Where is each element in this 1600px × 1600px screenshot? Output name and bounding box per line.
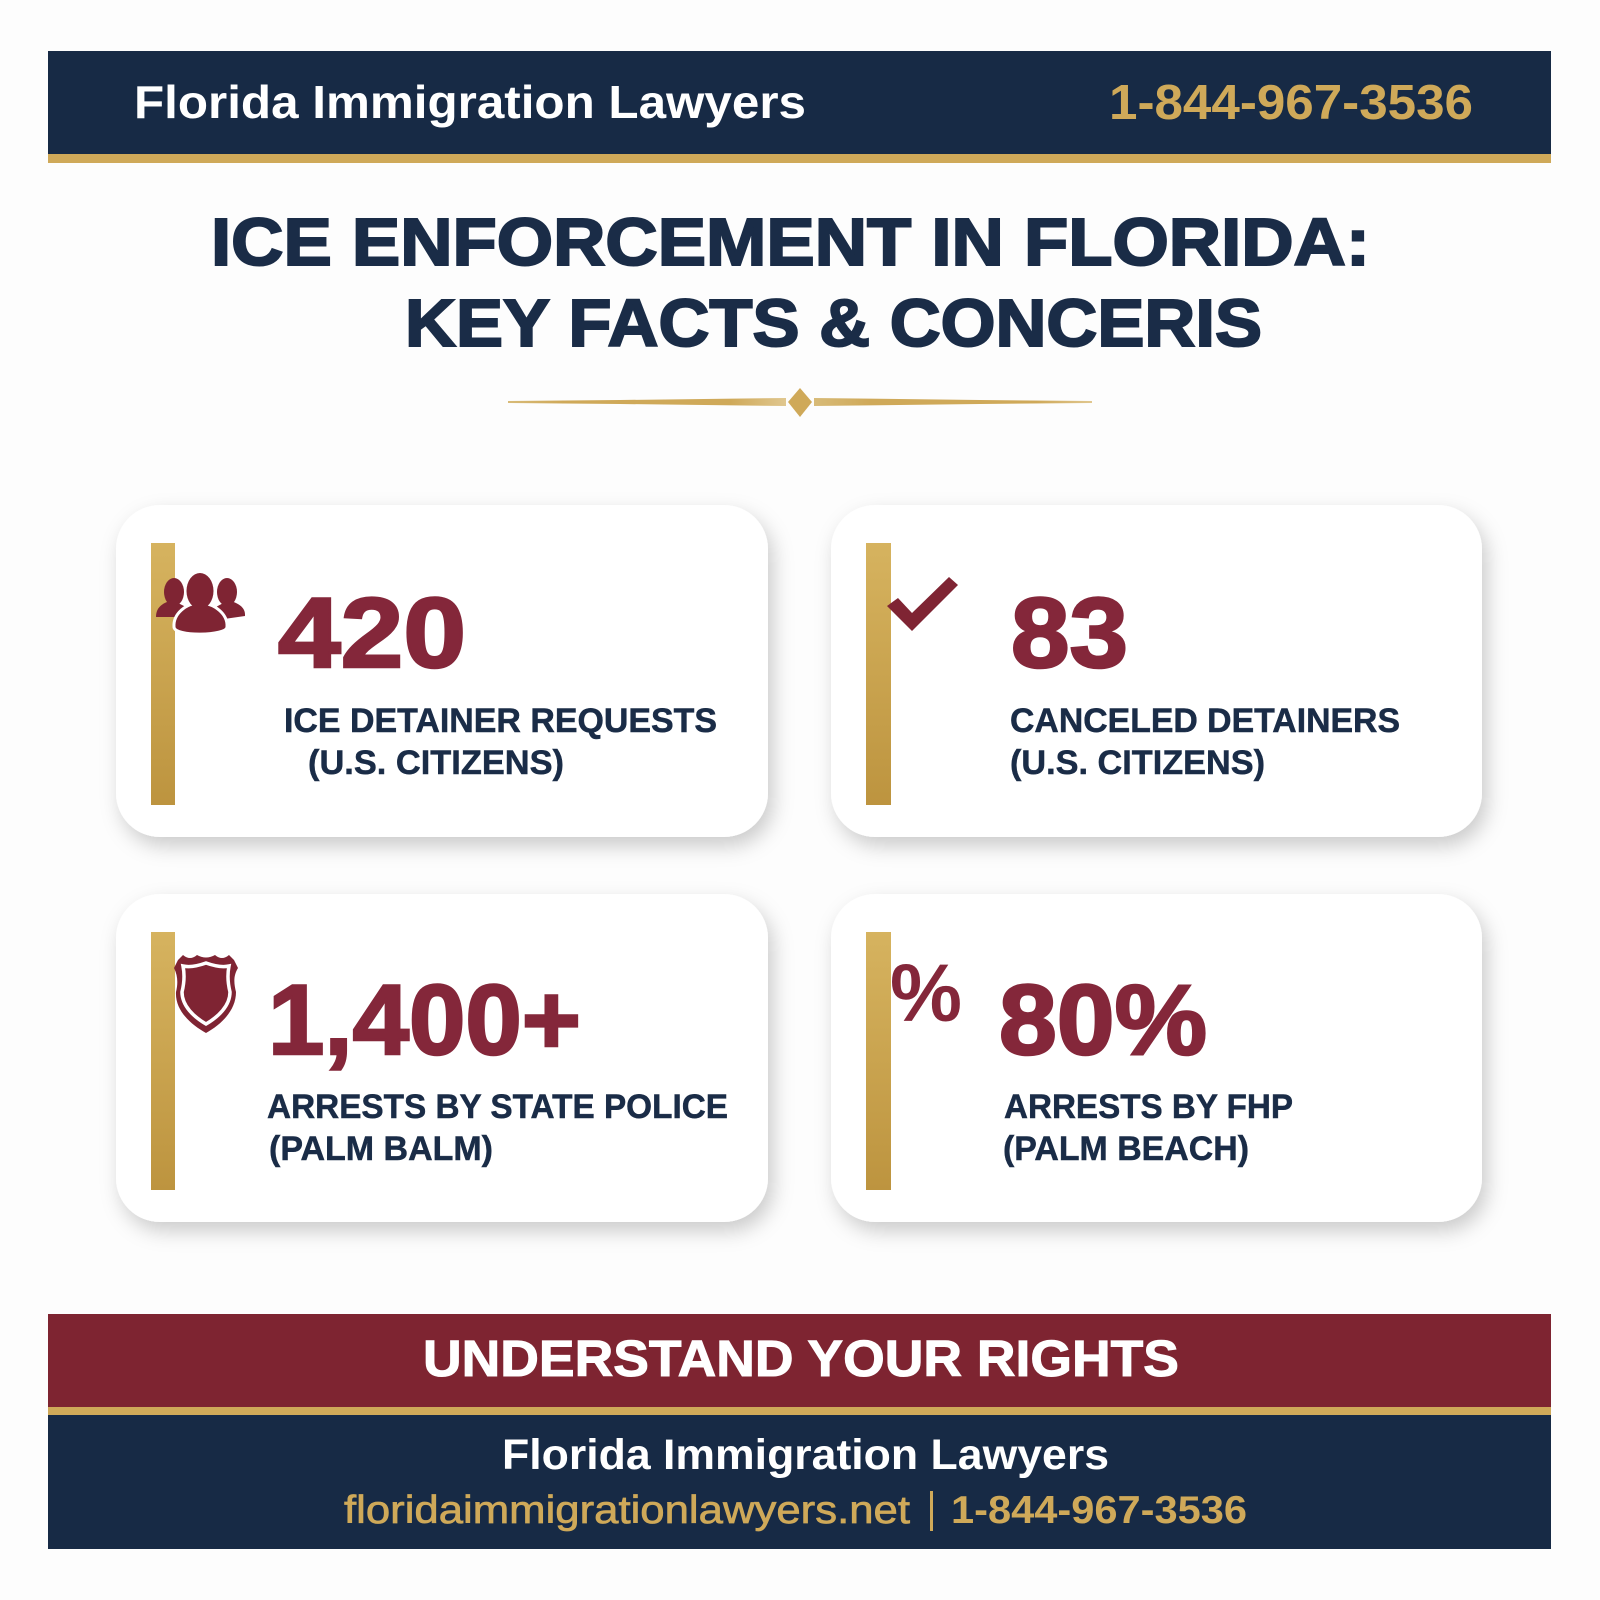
stat label: ARRESTS BY FHP (1004, 1088, 1293, 1126)
stat label: (U.S. CITIZENS) (1010, 744, 1265, 782)
footer band: contact details (48, 1415, 1551, 1549)
main title (211, 205, 1370, 361)
gold accent bar (866, 543, 891, 805)
phone number: 1-844-967-3536 (951, 1489, 1247, 1532)
stat label: (U.S. CITIZENS) (308, 744, 564, 782)
stat label (284, 702, 717, 782)
gold divider with diamond (508, 388, 1092, 417)
website: floridaimmigrationlawyers.net (344, 1489, 910, 1532)
firm name: Florida Immigration Lawyers (502, 1431, 1109, 1479)
stat: 83: 83 (1011, 577, 1128, 688)
stat label: (PALM BALM) (269, 1130, 493, 1168)
stat label: ARRESTS BY STATE POLICE (267, 1088, 728, 1126)
phone number: 1-844-967-3536 (1109, 76, 1473, 130)
stat: 420: 420 (278, 577, 466, 688)
icon: shield badge (174, 955, 238, 1033)
stat label (1010, 702, 1400, 782)
stat label: ICE DETAINER REQUESTS (284, 702, 717, 740)
panel: ICE detainer requests (116, 505, 768, 837)
icon: check mark (887, 577, 958, 631)
gold accent bar (866, 932, 891, 1190)
stat: 80%: 80% (999, 964, 1207, 1075)
firm name: Florida Immigration Lawyers (134, 76, 806, 128)
stat label (267, 1088, 728, 1168)
gold accent bar (151, 543, 175, 805)
stat label (1003, 1088, 1293, 1168)
stat label: (PALM BEACH) (1003, 1130, 1249, 1168)
top header band (48, 51, 1551, 163)
icon: percent sign: % (890, 948, 962, 1039)
main title: KEY FACTS & CONCERIS (405, 286, 1262, 361)
main title: ICE ENFORCEMENT IN FLORIDA: (211, 205, 1370, 280)
panel: arrests by state police (116, 894, 768, 1222)
panel: arrests by FHP (831, 894, 1482, 1222)
panel: canceled detainers (831, 505, 1482, 837)
separator (930, 1491, 933, 1531)
gold accent bar (151, 932, 175, 1190)
icon: people group (156, 573, 245, 634)
call to action heading: UNDERSTAND YOUR RIGHTS (423, 1330, 1179, 1387)
stat label: CANCELED DETAINERS (1010, 702, 1400, 740)
stat: 1,400+: 1,400+ (268, 964, 581, 1075)
footer band: call to action (48, 1314, 1551, 1415)
